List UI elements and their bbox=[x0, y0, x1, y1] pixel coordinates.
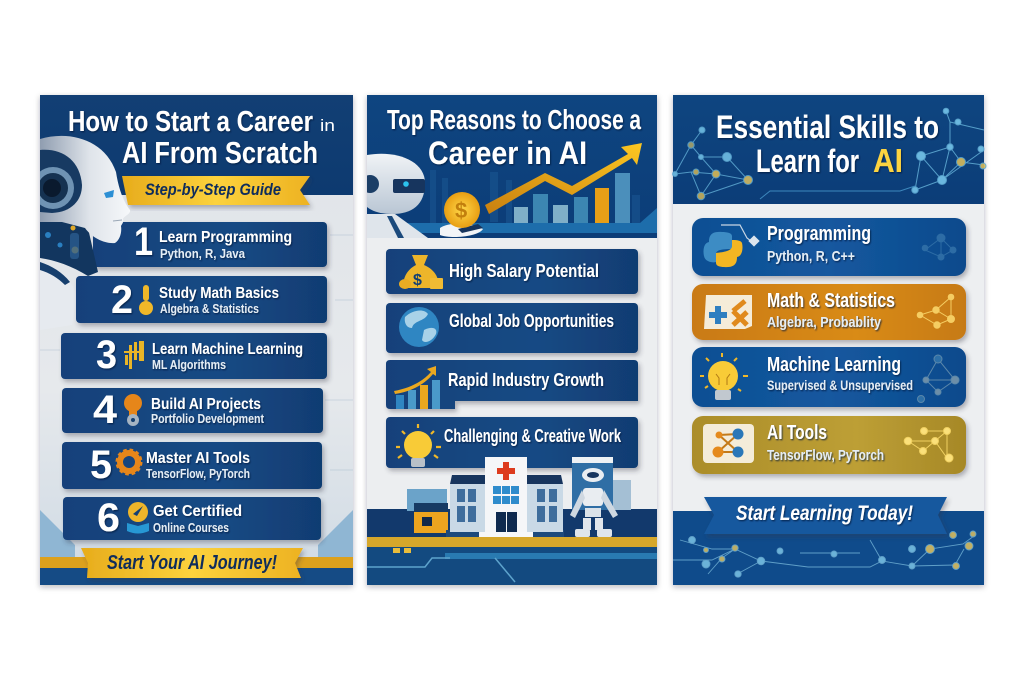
ribbon: start your ai journey bbox=[81, 548, 303, 578]
icon: gold coin: $ bbox=[455, 198, 467, 223]
step 2: 2 bbox=[111, 278, 133, 322]
ribbon: step-by-step guide bbox=[122, 176, 310, 205]
step 4: Build AI Projects bbox=[151, 396, 261, 413]
heading: in bbox=[320, 116, 335, 135]
heading: Career in AI bbox=[428, 135, 587, 171]
step 2: Algebra & Statistics bbox=[160, 301, 259, 316]
icon: certificate bbox=[127, 502, 149, 534]
icon: ml bars bbox=[124, 341, 144, 369]
step 1: Python, R, Java bbox=[160, 246, 246, 261]
card: programming: Python, R, C++ bbox=[767, 248, 855, 265]
step 5 bbox=[62, 442, 322, 489]
step 5: Master AI Tools bbox=[146, 450, 250, 467]
step 1 bbox=[93, 220, 327, 267]
heading: AI From Scratch bbox=[122, 135, 318, 170]
panel: essential skills bbox=[672, 95, 986, 585]
icon: light bulb bbox=[396, 424, 441, 467]
heading: AI bbox=[873, 142, 903, 179]
panel: top reasons bbox=[361, 95, 657, 585]
card: math: Algebra, Probablity bbox=[767, 314, 882, 331]
heading bbox=[68, 106, 335, 170]
reason: global jobs bbox=[386, 303, 638, 353]
icon: growth chart bbox=[394, 366, 440, 409]
icon: gold coin bbox=[444, 192, 480, 228]
network motif bbox=[904, 428, 953, 462]
heading: Top Reasons to Choose a bbox=[387, 104, 641, 135]
header band bbox=[40, 95, 353, 195]
card: programming bbox=[692, 218, 966, 276]
footer band bbox=[673, 511, 984, 585]
card: programming: Programming bbox=[767, 223, 871, 245]
card: ai tools: AI Tools bbox=[767, 422, 827, 444]
network motif bbox=[917, 294, 954, 328]
network: left bbox=[672, 127, 752, 200]
hand bbox=[440, 224, 483, 237]
icon: light bulb bbox=[700, 353, 748, 400]
step 1: Learn Programming bbox=[159, 229, 292, 246]
step 2 bbox=[76, 276, 327, 323]
ribbon: start your ai journey: Start Your AI Journey! bbox=[107, 552, 277, 574]
reason: high salary: High Salary Potential bbox=[449, 261, 599, 281]
card: machine learning: Machine Learning bbox=[767, 354, 901, 376]
step 3: Learn Machine Learning bbox=[152, 341, 303, 358]
icon: project gear bbox=[124, 394, 142, 426]
step 3: ML Algorithms bbox=[152, 357, 226, 372]
ribbon: step-by-step guide: Step-by-Step Guide bbox=[145, 180, 281, 199]
step 4 bbox=[62, 388, 323, 433]
step 1: 1 bbox=[134, 220, 153, 264]
step 6 bbox=[63, 496, 321, 540]
heading bbox=[716, 109, 939, 179]
gold stripe bbox=[367, 537, 657, 547]
illustration: robot bbox=[361, 154, 428, 238]
step 6: 6 bbox=[97, 496, 120, 540]
icon: money bag: $ bbox=[413, 272, 422, 289]
network: footer bbox=[673, 531, 976, 577]
network motif bbox=[918, 355, 959, 402]
step 3: 3 bbox=[96, 333, 117, 377]
icon: gear bbox=[117, 450, 141, 474]
heading: Essential Skills to bbox=[716, 109, 939, 145]
ribbon: start learning today bbox=[704, 497, 947, 534]
footer band bbox=[367, 509, 657, 585]
network: right bbox=[912, 108, 986, 193]
step 2: Study Math Basics bbox=[159, 285, 279, 302]
arrow: growth bbox=[485, 143, 642, 214]
step 6: Get Certified bbox=[153, 503, 242, 520]
icon: money bag bbox=[399, 255, 443, 289]
reason: global jobs: Global Job Opportunities bbox=[449, 311, 614, 331]
bar chart bbox=[514, 173, 630, 223]
icon: node graph bbox=[703, 424, 754, 463]
card: machine learning: Supervised & Unsupervised bbox=[767, 377, 913, 393]
heading bbox=[387, 104, 641, 171]
step 3 bbox=[61, 333, 327, 379]
icon: plus and times bbox=[704, 295, 752, 329]
heading: How to Start a Career bbox=[68, 106, 313, 138]
reason: high salary bbox=[386, 249, 638, 294]
reason: creative work: Challenging & Creative Work bbox=[444, 426, 622, 446]
heading: Learn for bbox=[756, 143, 859, 179]
card: ai tools bbox=[692, 416, 966, 474]
illustration: hospital and robot bbox=[407, 457, 631, 538]
step 5: TensorFlow, PyTorch bbox=[146, 466, 250, 481]
card: ai tools: TensorFlow, PyTorch bbox=[767, 447, 884, 464]
reason: creative work bbox=[386, 417, 638, 468]
step 4: Portfolio Development bbox=[151, 411, 265, 426]
icon: math badge bbox=[139, 285, 153, 315]
header band bbox=[673, 95, 984, 204]
step 6: Online Courses bbox=[153, 520, 229, 535]
reason: rapid growth bbox=[386, 360, 638, 409]
reason: rapid growth: Rapid Industry Growth bbox=[448, 370, 604, 390]
step 4: 4 bbox=[93, 388, 118, 432]
card: machine learning bbox=[692, 347, 966, 407]
panel: how to start a career bbox=[32, 95, 353, 585]
gold stripe bbox=[40, 557, 353, 568]
icon: python logo bbox=[704, 225, 760, 267]
ribbon: start learning today: Start Learning Today! bbox=[736, 502, 913, 525]
card: math: Math & Statistics bbox=[767, 290, 895, 312]
header band bbox=[367, 95, 657, 238]
icon: globe bbox=[399, 307, 439, 347]
step 5: 5 bbox=[90, 443, 112, 487]
card: math bbox=[692, 284, 966, 340]
illustration: robot head bbox=[40, 136, 130, 285]
base band bbox=[367, 208, 657, 233]
network motif bbox=[922, 234, 956, 260]
